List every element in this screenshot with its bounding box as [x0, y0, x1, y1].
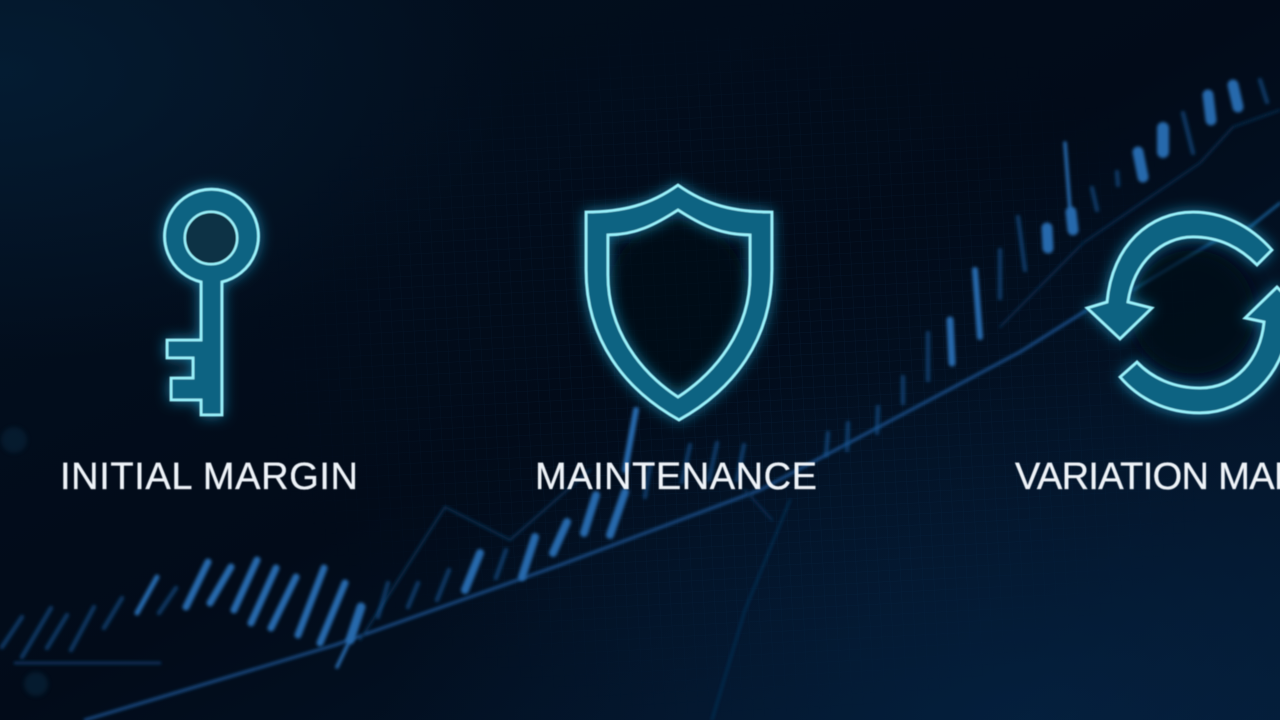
icon: shield [586, 185, 772, 420]
bright candles [137, 85, 1238, 667]
icon: key [164, 189, 259, 415]
label: initial margin: INITIAL MARGIN [60, 456, 358, 498]
label: maintenance: MAINTENANCE [535, 456, 817, 498]
icon: refresh arrows [1087, 212, 1280, 413]
dim candles [2, 80, 1267, 657]
lower arrow [1120, 287, 1280, 413]
upper arrow [1087, 212, 1272, 339]
